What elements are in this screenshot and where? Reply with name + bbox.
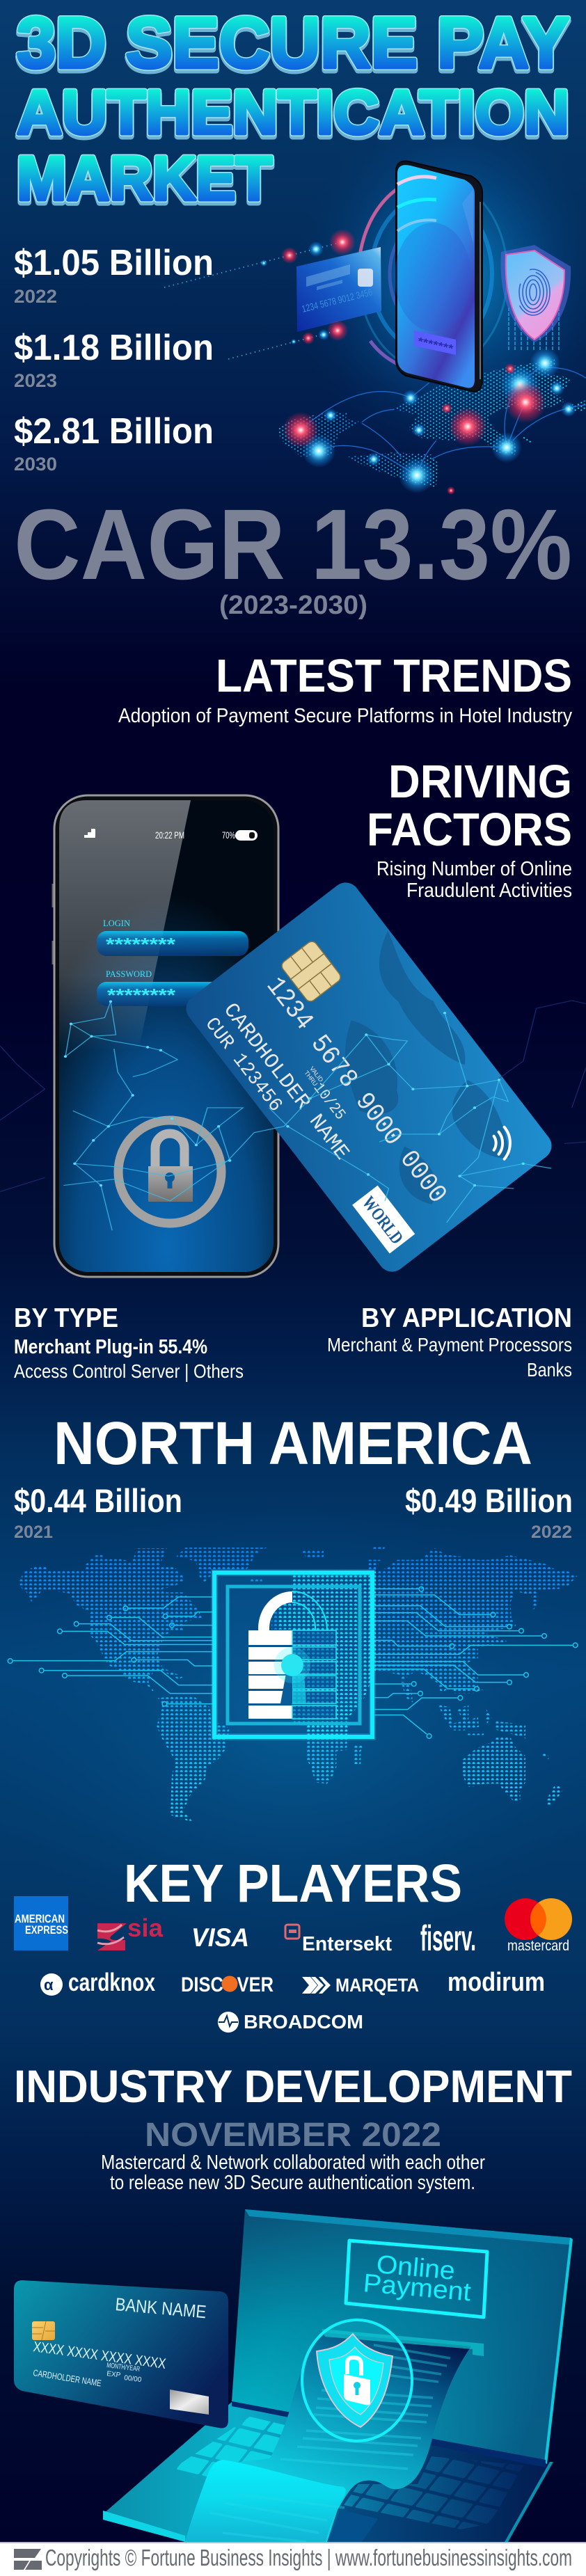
stat 2023: 2023 bbox=[14, 370, 57, 391]
logo: Broadcom: BROADCOM bbox=[244, 2011, 363, 2033]
industry development bbox=[14, 2060, 572, 2194]
credit card: 1234 5678 9012 3456 bbox=[301, 286, 374, 315]
network nodes bbox=[260, 229, 576, 495]
chip bbox=[280, 939, 342, 1003]
footer logo bbox=[14, 2549, 42, 2570]
segmentation: by type: Merchant Plug-in 55.4% bbox=[14, 1336, 207, 1358]
rings behind phone bbox=[358, 177, 507, 371]
driving factors: FACTORS bbox=[367, 804, 572, 856]
receipt text lines bbox=[209, 2345, 450, 2542]
login field: LOGIN bbox=[103, 918, 131, 928]
valid thru: 10/25 bbox=[310, 1080, 349, 1123]
segmentation: by application: Banks bbox=[527, 1359, 572, 1381]
logo: Entersekt bbox=[285, 1925, 392, 1955]
industry development: to release new 3D Secure authentication system. bbox=[110, 2172, 475, 2194]
stat 2022: 2022 bbox=[14, 286, 57, 307]
card world map bbox=[275, 931, 543, 1219]
title: MARKET bbox=[17, 146, 272, 216]
title: 3D SECURE PAY bbox=[17, 3, 569, 83]
status bar: 70% bbox=[222, 829, 235, 841]
title: AUTHENTICATION bbox=[17, 77, 569, 147]
valid thru: THRU bbox=[303, 1070, 319, 1088]
phone bbox=[395, 161, 482, 392]
dotted world map with lock bbox=[0, 1538, 586, 1830]
title: MARKET bbox=[17, 143, 272, 213]
password field bbox=[97, 969, 248, 1006]
contactless icon bbox=[494, 1127, 510, 1159]
padlock icon bbox=[118, 1120, 221, 1223]
world label: WORLD bbox=[358, 1193, 407, 1248]
bank card: CUR 123456 bbox=[200, 1014, 286, 1116]
driving factors: Fraudulent Activities bbox=[406, 880, 572, 902]
security frame bbox=[214, 1573, 372, 1737]
dotted world map bbox=[278, 359, 585, 487]
smartphone with lock bbox=[52, 795, 278, 1277]
laptop screen bbox=[232, 2209, 573, 2467]
login field bbox=[97, 918, 248, 956]
footer bbox=[0, 2542, 586, 2576]
segmentation: by application: BY APPLICATION bbox=[361, 1303, 572, 1333]
valid thru bbox=[299, 1065, 350, 1123]
phone: ******* bbox=[416, 335, 454, 356]
segmentation: by type: BY TYPE bbox=[14, 1303, 118, 1333]
payment card: XXXX XXXX XXXX XXXX bbox=[32, 2339, 167, 2372]
valid thru: VALID bbox=[308, 1065, 325, 1083]
logo: Mastercard bbox=[505, 1898, 572, 1954]
stat 2022 bbox=[14, 243, 214, 307]
latest trends bbox=[118, 650, 572, 727]
logo: American Express bbox=[14, 1896, 68, 1950]
screen glare bbox=[59, 800, 191, 1051]
online payment label bbox=[346, 2241, 487, 2317]
hero illustration: phone, card, shield and glowing map bbox=[164, 161, 586, 501]
logo: Discover: DISCOVER bbox=[181, 1973, 274, 1996]
online payment label: Payment bbox=[362, 2268, 473, 2307]
CAGR period: (2023-2030) bbox=[219, 591, 367, 620]
logo: SIA: sia bbox=[127, 1914, 164, 1942]
shield with lock bbox=[302, 2320, 412, 2441]
logo: Visa: VISA bbox=[191, 1923, 249, 1952]
stat 2030: 2030 bbox=[14, 454, 57, 475]
payment card: BANK NAME bbox=[114, 2293, 207, 2322]
online payment label: Online bbox=[375, 2250, 456, 2285]
development date: NOVEMBER 2022 bbox=[145, 2117, 441, 2154]
driving factors: DRIVING bbox=[388, 756, 572, 808]
password field: ******** bbox=[107, 985, 176, 1005]
north america values: $0.44 Billion bbox=[14, 1482, 182, 1519]
payment card: EXP bbox=[106, 2370, 121, 2379]
receipt paper bbox=[185, 2329, 484, 2542]
segmentation: by application bbox=[327, 1303, 572, 1381]
logo: Marqeta: MARQETA bbox=[335, 1975, 419, 1996]
north america values: 2022 bbox=[531, 1522, 572, 1542]
faint background network bbox=[0, 1001, 586, 1191]
laptop online payment illustration bbox=[14, 2209, 573, 2542]
security network overlay bbox=[0, 1000, 586, 1230]
logo: Cardknox: α bbox=[44, 1976, 54, 1994]
title bbox=[17, 3, 569, 216]
dotted connector lines bbox=[164, 242, 342, 359]
payment card: CARDHOLDER NAME bbox=[33, 2367, 102, 2388]
title: AUTHENTICATION bbox=[17, 80, 569, 150]
stat 2022: $1.05 Billion bbox=[14, 243, 214, 283]
title: 3D SECURE PAY bbox=[17, 6, 569, 86]
stat 2030 bbox=[14, 411, 214, 475]
key player logos bbox=[14, 1896, 572, 2033]
bank card bbox=[180, 877, 557, 1278]
card number: 1234 5678 9000 0000 bbox=[260, 972, 452, 1209]
login field: ******** bbox=[106, 934, 176, 955]
map arcs bbox=[301, 363, 586, 475]
stat 2023 bbox=[14, 328, 214, 391]
payment card: MONTH/YEAR bbox=[106, 2362, 141, 2374]
logo: Marqeta bbox=[302, 1975, 419, 1996]
logo: Entersekt: Entersekt bbox=[302, 1933, 392, 1955]
digital padlock bbox=[248, 1591, 336, 1719]
logo: Modirum: modirum bbox=[448, 1968, 545, 1997]
logo: American Express: EXPRESS bbox=[25, 1923, 68, 1937]
logo: Cardknox: cardknox bbox=[68, 1968, 155, 1996]
credit card bbox=[296, 247, 381, 332]
payment card: 00/00 bbox=[124, 2374, 142, 2384]
market size stats bbox=[14, 243, 214, 475]
data stream under shield bbox=[508, 306, 560, 351]
status bar: 20:22 PM bbox=[155, 829, 184, 841]
logo: SIA bbox=[97, 1914, 164, 1950]
title: MARKET bbox=[17, 143, 272, 213]
status bar bbox=[84, 829, 258, 841]
key players heading: KEY PLAYERS bbox=[124, 1854, 462, 1914]
laptop base bbox=[103, 2402, 553, 2542]
title: 3D SECURE PAY bbox=[17, 3, 569, 83]
stat 2030: $2.81 Billion bbox=[14, 411, 214, 452]
circuit lines bbox=[8, 1587, 578, 1738]
logo: Fiserv: fiserv. bbox=[420, 1918, 476, 1959]
shield with fingerprint bbox=[500, 245, 571, 342]
logo: American Express: AMERICAN bbox=[15, 1912, 65, 1925]
stat 2023: $1.18 Billion bbox=[14, 328, 214, 368]
north america values: 2021 bbox=[14, 1522, 53, 1542]
development description: Mastercard & Network collaborated with each other bbox=[101, 2152, 485, 2174]
payment card bbox=[14, 2280, 228, 2428]
north america values bbox=[14, 1482, 573, 1542]
cardholder: CARDHOLDER NAME bbox=[218, 999, 354, 1165]
logo: Cardknox bbox=[40, 1968, 155, 1996]
title: AUTHENTICATION bbox=[17, 77, 569, 147]
network nodes bbox=[64, 1000, 525, 1186]
north america heading: NORTH AMERICA bbox=[54, 1410, 532, 1477]
segmentation: by type: Access Control Server | Others bbox=[14, 1360, 244, 1382]
segmentation: by type bbox=[14, 1303, 244, 1382]
driving factors bbox=[367, 756, 572, 902]
password field: PASSWORD bbox=[106, 969, 152, 979]
logo: Mastercard: mastercard bbox=[507, 1938, 569, 1954]
